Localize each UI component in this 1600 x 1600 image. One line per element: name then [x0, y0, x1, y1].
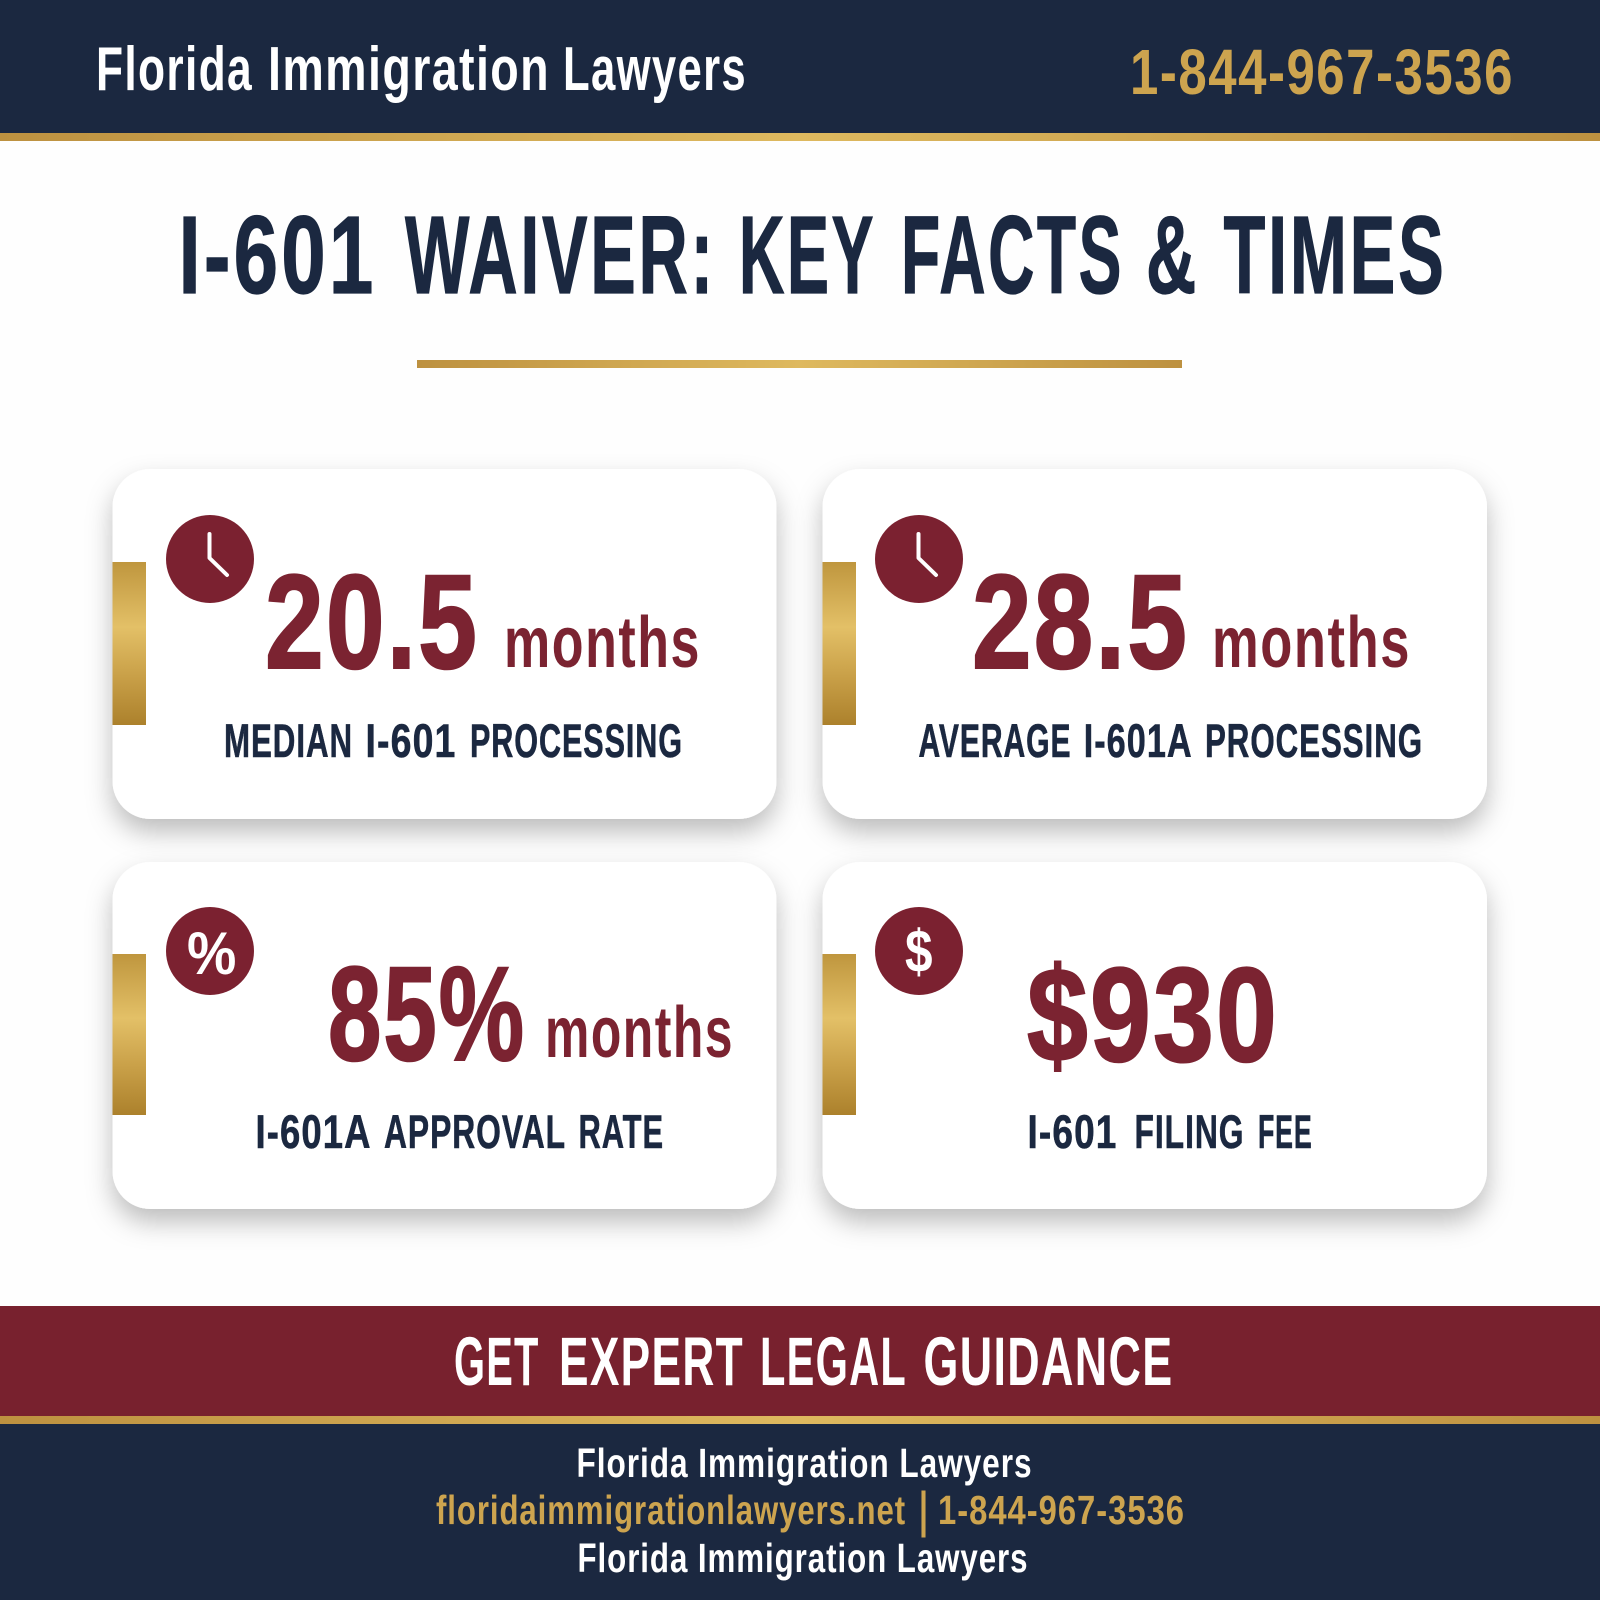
title rule	[417, 360, 1182, 368]
stat unit: months	[545, 993, 734, 1073]
stat label: MEDIAN	[224, 714, 353, 767]
stat value: $930	[1027, 941, 1279, 1090]
header firm name: Immigration	[268, 35, 550, 104]
card: filing fee	[822, 862, 1487, 1209]
icon: percent	[166, 907, 254, 995]
stat label	[918, 714, 1423, 767]
title: FACTS	[901, 194, 1124, 317]
header firm name	[96, 35, 747, 104]
footer contact line	[436, 1482, 1185, 1538]
card: approval rate	[112, 862, 776, 1209]
title: WAIVER:	[405, 194, 716, 317]
title: TIMES	[1224, 194, 1446, 317]
stat label: I-601	[1028, 1105, 1118, 1158]
footer	[0, 1416, 1600, 1600]
footer contact line: 1-844-967-3536	[938, 1487, 1185, 1533]
footer firm name: Florida Immigration Lawyers	[576, 1440, 1032, 1486]
title: I-601	[178, 194, 376, 317]
title	[178, 194, 1446, 317]
call-to-action band	[0, 1306, 1600, 1416]
stat label: AVERAGE	[918, 714, 1072, 767]
header band	[0, 0, 1600, 141]
accent bar	[112, 954, 146, 1115]
footer contact line: floridaimmigrationlawyers.net	[436, 1487, 906, 1533]
stat label: APPROVAL	[384, 1105, 566, 1158]
accent bar	[822, 954, 856, 1115]
icon: dollar: $	[905, 918, 934, 985]
stat label: I-601A	[256, 1105, 372, 1158]
stat label: PROCESSING	[1205, 714, 1423, 767]
stat label: FILING	[1134, 1105, 1244, 1158]
stat value: 28.5	[972, 548, 1189, 697]
footer contact line: |	[917, 1482, 932, 1538]
call-to-action text: GUIDANCE	[924, 1323, 1174, 1400]
call-to-action text: GET	[454, 1323, 540, 1400]
stat unit: months	[1212, 603, 1411, 683]
stat value: 85%	[328, 940, 526, 1089]
stat label	[256, 1105, 664, 1158]
title: KEY	[739, 194, 876, 317]
accent bar	[112, 562, 146, 725]
icon: clock	[875, 515, 963, 603]
stat label: I-601	[366, 714, 456, 767]
header firm name: Florida	[96, 35, 253, 104]
icon: dollar	[875, 907, 963, 995]
call-to-action text: EXPERT	[559, 1323, 744, 1400]
stat label: FEE	[1258, 1105, 1312, 1158]
footer firm name repeat: Florida Immigration Lawyers	[578, 1535, 1028, 1581]
card: median processing	[112, 469, 776, 819]
accent bar	[822, 562, 856, 725]
call-to-action text: LEGAL	[760, 1323, 907, 1400]
header firm name: Lawyers	[563, 35, 747, 104]
header phone: 1-844-967-3536	[1130, 36, 1514, 108]
stat label	[1028, 1105, 1312, 1158]
title: &	[1146, 194, 1199, 317]
stat label	[224, 714, 683, 767]
card: average processing	[822, 469, 1487, 819]
stat label: PROCESSING	[470, 714, 683, 767]
stat unit: months	[504, 603, 701, 683]
stat label: I-601A	[1084, 714, 1193, 767]
call-to-action text	[454, 1323, 1174, 1400]
stat label: RATE	[578, 1105, 664, 1158]
icon: percent: %	[187, 920, 238, 987]
stat value: 20.5	[265, 548, 479, 697]
icon: clock	[166, 515, 254, 603]
